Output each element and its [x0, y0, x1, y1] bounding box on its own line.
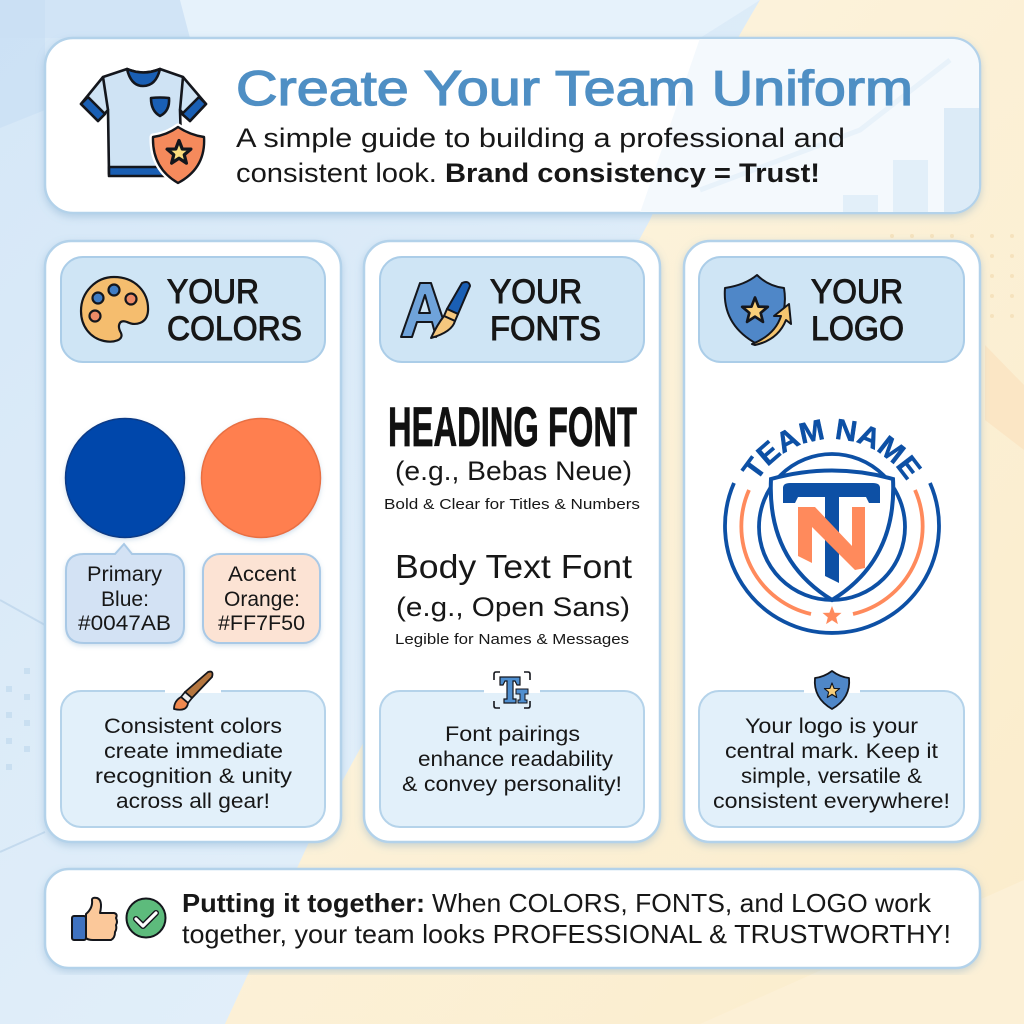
label: YOUR — [167, 273, 259, 311]
subtitle — [236, 123, 845, 188]
body font sample: (e.g., Open Sans) — [396, 592, 630, 622]
label: accent orange — [203, 554, 320, 643]
footer message: When COLORS, FONTS, and LOGO work — [432, 888, 932, 918]
swatch: primary blue — [66, 418, 184, 538]
callout: fonts: Font pairings — [445, 723, 580, 746]
label: COLORS — [167, 310, 302, 348]
callout: fonts: enhance readability — [418, 748, 614, 771]
subtitle: A simple guide to building a professional and — [236, 123, 845, 153]
heading font sample — [384, 395, 640, 513]
footer panel — [45, 869, 980, 968]
icon: small shield — [815, 671, 849, 709]
heading: your fonts — [380, 257, 644, 362]
callout: colors: recognition & unity — [95, 765, 293, 788]
label: LOGO — [811, 310, 904, 348]
heading font sample: (e.g., Bebas Neue) — [395, 456, 632, 486]
icon: paintbrush — [174, 672, 212, 710]
callout: logo: simple, versatile & — [741, 765, 922, 788]
outer rings — [725, 454, 939, 633]
footer message — [182, 888, 951, 949]
label: accent orange: Orange: — [224, 588, 300, 611]
callout: logo: central mark. Keep it — [725, 740, 938, 763]
icon: thumbs up — [72, 898, 117, 940]
icon: letter A with pen — [401, 282, 470, 338]
panel: your colors — [45, 241, 341, 842]
label: YOUR — [490, 273, 582, 311]
heading font sample: HEADING FONT — [388, 395, 637, 458]
label: primary blue — [66, 544, 184, 643]
shield — [771, 470, 893, 600]
icon: type glyph — [494, 672, 530, 708]
label: primary blue: Primary — [87, 563, 163, 586]
footer message: together, your team looks PROFESSIONAL & TRUSTWORTHY! — [182, 919, 951, 949]
label: accent orange: #FF7F50 — [218, 612, 305, 635]
callout: logo: consistent everywhere! — [713, 790, 950, 813]
subtitle: consistent look. Brand consistency = Trust! — [236, 158, 820, 188]
icon: palette — [81, 277, 148, 342]
callout: colors: Consistent colors — [104, 715, 282, 738]
footer message: Putting it together: — [182, 888, 425, 918]
body font sample: Body Text Font — [395, 548, 632, 585]
icon: shield with star and arrow — [725, 275, 791, 345]
label — [811, 273, 904, 348]
body font sample: Legible for Names & Messages — [395, 631, 629, 648]
heading font sample: Bold & Clear for Titles & Numbers — [384, 496, 640, 513]
callout: fonts: & convey personality! — [402, 773, 622, 796]
callout: logo — [699, 671, 964, 827]
label: primary blue: #0047AB — [78, 612, 171, 635]
team logo — [723, 418, 941, 635]
header panel — [45, 38, 980, 213]
label: accent orange: Accent — [228, 563, 296, 586]
panel: your fonts — [364, 241, 660, 842]
swatch: accent orange — [202, 418, 320, 538]
callout: colors: across all gear! — [116, 790, 270, 813]
body font sample — [395, 548, 632, 648]
callout: fonts — [380, 672, 644, 827]
label: FONTS — [490, 310, 601, 348]
heading: your colors — [61, 257, 325, 362]
panel: your logo — [679, 239, 985, 850]
title: Create Your Team Uniform — [236, 62, 913, 116]
callout: colors: create immediate — [104, 740, 283, 763]
label — [167, 273, 302, 348]
label: primary blue: Blue: — [101, 588, 149, 611]
logo wordmark: TEAM NAME — [740, 418, 922, 480]
decorative header chart — [640, 38, 980, 213]
label — [490, 273, 601, 348]
icon: green check — [126, 898, 166, 938]
callout: logo: Your logo is your — [745, 715, 918, 738]
callout: colors — [61, 672, 325, 827]
heading: your logo — [699, 257, 964, 362]
icon: team shirt with shield — [81, 69, 206, 183]
label: YOUR — [811, 273, 903, 311]
